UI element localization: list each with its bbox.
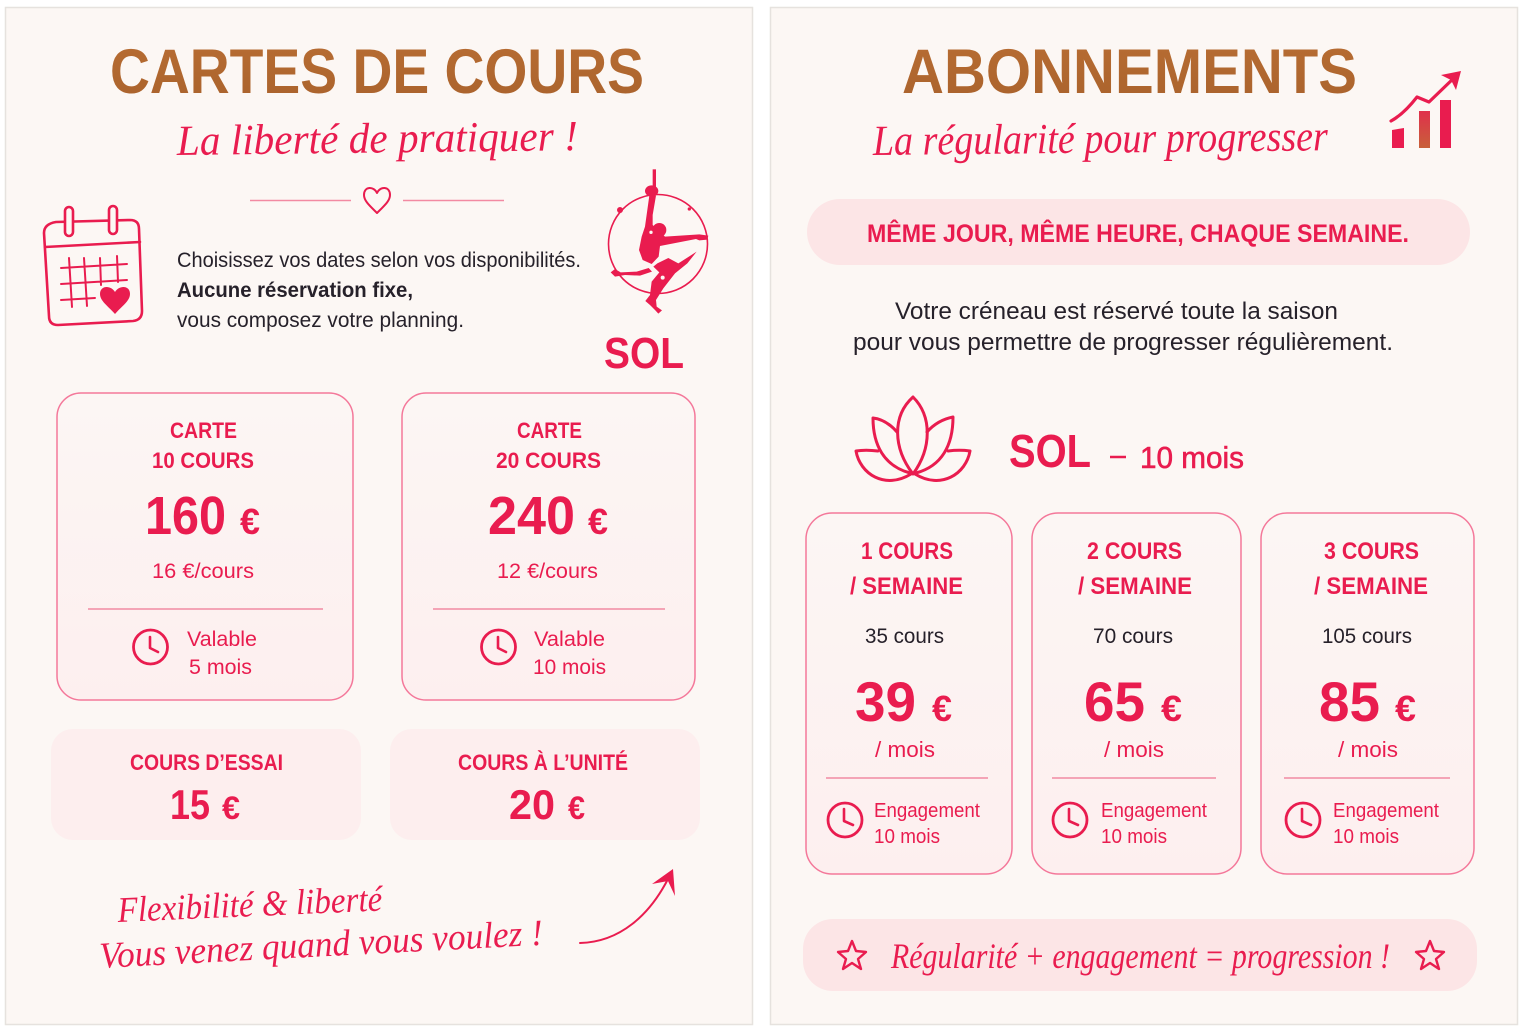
card: carte 20 cours [402, 393, 695, 700]
card: cours à l'unité: 20 [509, 781, 555, 828]
card: 2 cours: 10 mois [1101, 826, 1167, 848]
icon: growth chart [1391, 71, 1461, 148]
card: 1 cours: 1 COURS [861, 538, 953, 565]
card: 3 cours: € [1395, 688, 1416, 729]
card: carte 20 cours: 240 [488, 486, 575, 546]
card: carte 20 cours: CARTE [517, 418, 582, 443]
heading: sol 10 mois: 10 mois [1140, 440, 1244, 475]
card: 3 cours: / SEMAINE [1314, 573, 1428, 600]
card: 3 cours: 3 COURS [1324, 538, 1419, 565]
closing script text: Flexibilité & liberté [116, 878, 385, 930]
icon: aerial hoop dancer: SOL [604, 329, 684, 378]
divider with heart [250, 188, 504, 213]
card: carte 20 cours: 10 mois [533, 656, 606, 679]
card: carte 10 cours: 160 [145, 486, 226, 546]
title: abonnements: ABONNEMENTS [902, 37, 1357, 107]
card: 2 cours: / mois [1104, 737, 1164, 762]
card: carte 10 cours: CARTE [170, 418, 237, 443]
icon: calendar with heart [44, 206, 142, 325]
card: 1 cours: / SEMAINE [850, 573, 963, 600]
icon: lotus [856, 397, 970, 480]
card: 2 cours: Engagement [1101, 800, 1207, 822]
arrow [580, 869, 675, 943]
icon: clock [1053, 803, 1087, 837]
card: carte 20 cours: 12 €/cours [497, 560, 598, 583]
card: cours d'essai: 15 [170, 781, 210, 828]
panel: cartes de cours [6, 8, 752, 1024]
card: carte 10 cours [57, 393, 353, 700]
card: cours d'essai [51, 729, 361, 840]
card: 1 cours [806, 513, 1012, 874]
card: 2 cours: 2 COURS [1087, 538, 1182, 565]
card: cours à l'unité: € [568, 790, 585, 826]
banner: régularité: Régularité + engagement = progression ! [890, 936, 1390, 976]
card: carte 20 cours: Valable [534, 628, 605, 651]
subtitle script: La régularité pour progresser [872, 113, 1328, 165]
card: 1 cours: Engagement [874, 800, 980, 822]
card: 1 cours: € [932, 688, 952, 729]
card: cours à l'unité [390, 729, 700, 840]
panel: abonnements [770, 8, 1518, 1024]
card: carte 10 cours: 16 €/cours [152, 560, 254, 583]
icon: clock [482, 630, 516, 664]
card: 3 cours: 105 cours [1322, 625, 1412, 648]
banner: régularité [803, 919, 1477, 991]
heading: sol 10 mois: SOL [1009, 425, 1091, 477]
intro text: Choisissez vos dates selon vos disponibilités. [177, 249, 581, 272]
card: cours d'essai: € [222, 790, 240, 826]
card: carte 10 cours: € [240, 501, 260, 542]
card: carte 20 cours: € [588, 501, 608, 542]
intro text: vous composez votre planning. [177, 309, 464, 332]
intro text: Aucune réservation fixe, [177, 279, 413, 302]
card: 3 cours: 85 [1319, 670, 1380, 733]
card: 2 cours: 70 cours [1093, 625, 1173, 648]
intro text: Votre créneau est réservé toute la saison [895, 298, 1338, 325]
card: carte 10 cours: Valable [187, 628, 257, 651]
heading: sol 10 mois [1009, 425, 1244, 477]
intro text: pour vous permettre de progresser régulièrement. [853, 329, 1393, 356]
card: 2 cours [1032, 513, 1241, 874]
card: 1 cours: 35 cours [865, 625, 944, 648]
card: 1 cours: / mois [875, 737, 935, 762]
card: 3 cours: Engagement [1333, 800, 1439, 822]
icon: star left [838, 941, 866, 969]
card: carte 10 cours: 10 COURS [152, 448, 254, 473]
card: 2 cours: € [1161, 688, 1182, 729]
card: 3 cours [1261, 513, 1474, 874]
card: 1 cours: 10 mois [874, 826, 940, 848]
card: carte 20 cours: 20 COURS [496, 448, 601, 473]
icon: clock [134, 630, 168, 664]
card: 2 cours: / SEMAINE [1078, 573, 1192, 600]
closing script text: Vous venez quand vous voulez ! [98, 913, 544, 977]
subtitle script: La liberté de pratiquer ! [176, 113, 578, 165]
icon: star right [1416, 941, 1444, 969]
banner: même jour [807, 199, 1470, 265]
card: carte 10 cours: 5 mois [189, 656, 252, 679]
card: cours d'essai: COURS D’ESSAI [130, 750, 283, 775]
card: 3 cours: / mois [1338, 737, 1398, 762]
intro text [177, 249, 581, 332]
intro text [853, 298, 1393, 356]
card: cours à l'unité: COURS À L’UNITÉ [458, 750, 628, 775]
title: cartes de cours: CARTES DE COURS [110, 37, 644, 107]
card: 3 cours: 10 mois [1333, 826, 1399, 848]
card: 1 cours: 39 [855, 670, 916, 733]
icon: clock [1286, 803, 1320, 837]
icon: aerial hoop dancer [604, 169, 708, 378]
card: 2 cours: 65 [1084, 670, 1145, 733]
closing script text [98, 878, 544, 977]
banner: même jour: MÊME JOUR, MÊME HEURE, CHAQUE SEMAINE. [867, 218, 1409, 248]
icon: clock [828, 803, 862, 837]
